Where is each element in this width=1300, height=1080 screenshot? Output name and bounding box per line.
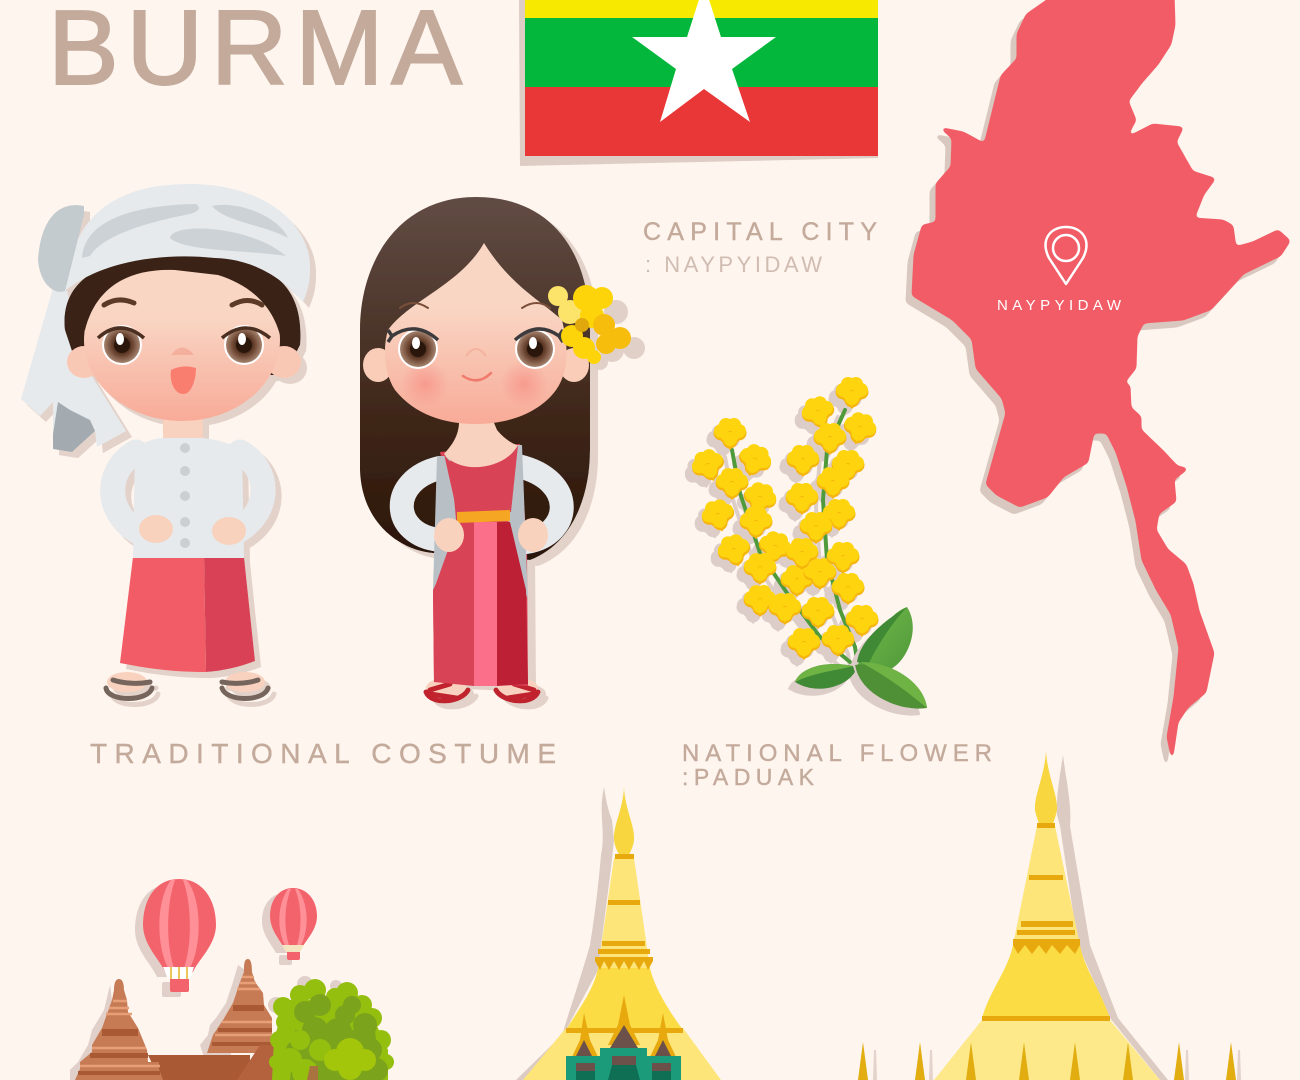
neck (163, 412, 203, 444)
temples of Bagan (70, 959, 274, 1080)
shirt (133, 438, 244, 558)
turban folds (82, 204, 288, 258)
pagoda shadow (516, 787, 614, 1080)
label: capital city: : NAYPYIDAW (645, 252, 822, 277)
stupa bell (982, 945, 1110, 1018)
dress (433, 444, 528, 686)
cheeks (401, 360, 449, 408)
neck (444, 418, 518, 467)
pagoda: Shwedagon large stupa (858, 750, 1241, 1080)
pagoda spire (614, 787, 634, 855)
connecting wall (148, 1055, 250, 1080)
left stupa (75, 979, 163, 1080)
nose (171, 348, 194, 355)
sandals (106, 680, 152, 698)
pagoda bell (566, 968, 683, 1030)
feet (426, 678, 466, 698)
tree (268, 976, 394, 1080)
label: traditional costume: TRADITIONAL COSTUME (90, 738, 556, 769)
pagoda shaft (598, 858, 650, 968)
eyes (102, 325, 142, 365)
national flower: paduak (687, 377, 927, 709)
ears (67, 346, 101, 378)
skirt (120, 557, 206, 672)
hair (65, 255, 300, 375)
ears (363, 348, 393, 382)
eyes (398, 329, 438, 369)
label: national flower (682, 740, 992, 790)
label: capital city (643, 218, 877, 277)
icon: location pin (1046, 227, 1086, 284)
flower blossoms and stems (687, 377, 880, 662)
stupa small spires (858, 1042, 1241, 1080)
hands (139, 515, 246, 545)
arms (402, 468, 440, 540)
eyebrows (104, 300, 262, 305)
character: girl in traditional costume (360, 197, 645, 701)
character: boy in traditional costume (21, 184, 310, 698)
feet (107, 672, 147, 692)
hands (434, 518, 548, 552)
stupa gold bands (982, 823, 1110, 1021)
map of Burma (913, 0, 1289, 756)
nose (466, 349, 486, 356)
pagoda: left golden stupa (516, 787, 721, 1080)
right stupa (207, 959, 274, 1080)
label: national flower: NATIONAL FLOWER (682, 740, 992, 767)
pagoda gold bands (566, 854, 683, 1057)
eyebrows (400, 303, 550, 308)
label: national flower: :PADUAK (682, 764, 815, 790)
sandals (426, 684, 468, 701)
face (385, 243, 567, 424)
hot air balloon large (143, 879, 216, 992)
mouth (463, 373, 491, 380)
mouth (171, 366, 196, 394)
turban (65, 184, 310, 302)
label: capital city: CAPITAL CITY (643, 218, 877, 246)
pagoda shrine (566, 1025, 681, 1080)
stupa spire (1035, 750, 1057, 824)
dress belt (457, 510, 510, 523)
flower leaves (795, 607, 927, 709)
flag of Burma (519, 0, 878, 166)
vest panels (433, 445, 528, 600)
hair (360, 197, 590, 560)
hair flower (548, 285, 645, 370)
stupa shaft (1013, 826, 1080, 945)
map label: NAYPYIDAW (997, 297, 1122, 314)
temple shadows (70, 965, 245, 1080)
stupa shadow (1057, 755, 1168, 1080)
dress panels (444, 445, 518, 512)
turban drape (21, 288, 126, 452)
head (84, 259, 280, 421)
pagoda base cone (523, 1028, 721, 1080)
hot air balloon small (270, 888, 317, 960)
shirt buttons (180, 443, 190, 548)
stupa base cone (934, 1020, 1160, 1080)
